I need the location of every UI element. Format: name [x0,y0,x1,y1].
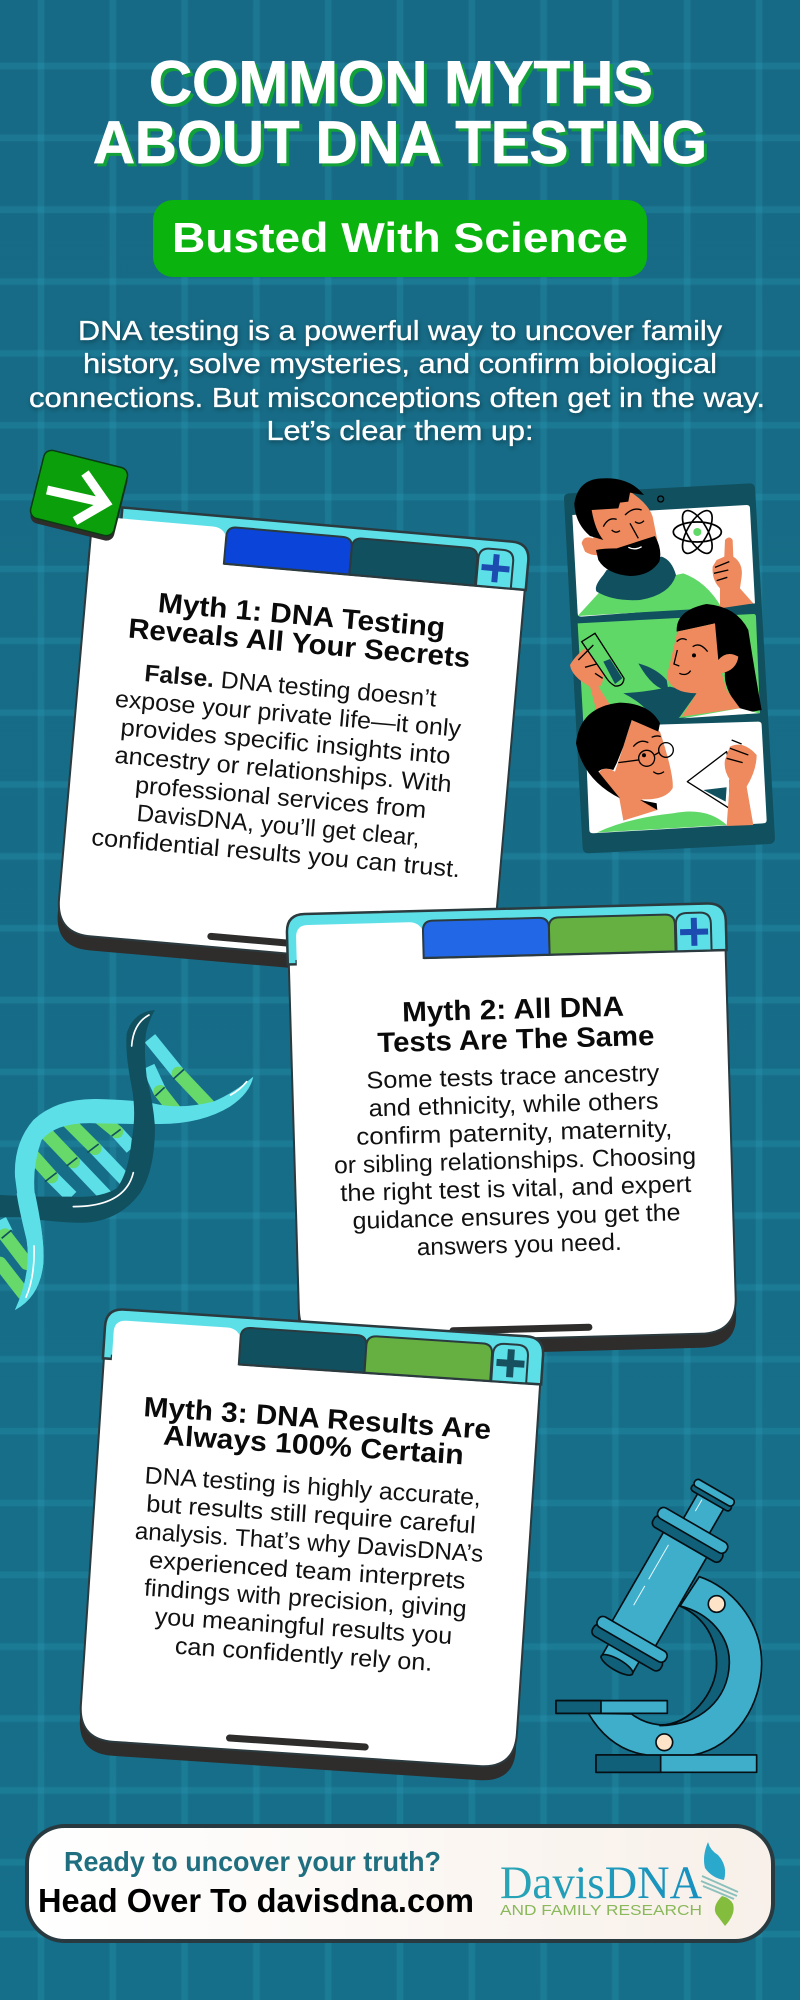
myth 2 text: or sibling relationships. Choosing [334,1143,696,1179]
myth 1 text: ancestry or relationships. With [114,742,453,798]
intro text [29,315,765,446]
myth 1 home bar [207,933,350,952]
myth 3 heading: Always 100% Certain [162,1420,465,1470]
panel 2: scientist with test tube [570,604,762,723]
myth 2 heading: Myth 2: All DNA [402,991,624,1028]
myth 3 text [127,1462,488,1680]
intro text: connections. But misconceptions often get in the way. [29,382,765,413]
myth 1 heading: Reveals All Your Secrets [127,613,471,673]
myth 3 heading: Myth 3: DNA Results Are [143,1391,492,1445]
myth 2 home bar [449,1324,592,1334]
myth 1 text: provides specific insights into [120,714,452,770]
microscope stage [556,1701,667,1713]
myth 2 text: answers you need. [416,1229,622,1261]
logo: DavisDNA: AND FAMILY RESEARCH [500,1902,702,1919]
myth 1 text: expose your private life—it only [114,686,462,743]
call to action banner [27,1826,773,1941]
myth 2 heading: Tests Are The Same [377,1020,655,1058]
panel 3: scientist with flask [576,703,767,833]
illustration: scientists on phone [564,478,775,853]
intro text: history, solve mysteries, and confirm biological [83,348,717,379]
myth 1 text [90,657,476,883]
icon: green arrow badge [29,449,129,542]
myth 3 text: but results still require careful [145,1491,476,1539]
logo: DavisDNA [500,1842,738,1926]
intro text: DNA testing is a powerful way to uncover family [78,315,722,346]
myth 1 text: professional services from [134,772,427,824]
myth 3 text: experienced team interprets [148,1547,466,1595]
myth 3 text: findings with precision, giving [143,1575,467,1623]
microscope arm [588,1577,762,1755]
illustration: DNA helix [0,1010,253,1310]
panel: myth 1 card [55,505,530,985]
myth 3 heading [141,1391,492,1472]
myth 1 heading [127,585,474,673]
title: COMMON MYTHS [149,49,653,116]
myth 2 text: guidance ensures you get the [352,1199,681,1235]
microscope tube [579,1470,752,1690]
microscope base [596,1755,757,1772]
myth 2 text: confirm paternity, maternity, [356,1115,673,1151]
myth 3 home bar [226,1734,369,1751]
panel: myth 2 card [286,903,737,1358]
myth 3 text: analysis. That’s why DavisDNA’s [134,1518,484,1568]
title [93,49,707,176]
myth 1 text: confidential results you can trust. [90,824,461,883]
panel 1: bearded scientist [572,478,755,617]
title: ABOUT DNA TESTING [93,109,707,176]
illustration: microscope [556,1470,762,1772]
intro text: Let’s clear them up: [266,415,534,446]
subtitle pill: Busted With Science [172,214,628,261]
myth 1 text: False. DNA testing doesn’t [143,660,438,713]
myth 3 text: you meaningful results you [154,1603,453,1650]
myth 1 text: DavisDNA, you’ll get clear, [136,800,421,852]
myth 3 text: DNA testing is highly accurate, [144,1462,482,1512]
myth 2 text: Some tests trace ancestry [366,1060,660,1094]
cta website: Head Over To davisdna.com [38,1882,474,1919]
myth 2 heading [376,990,655,1058]
subtitle pill [153,200,647,277]
logo: DavisDNA: DavisDNA [500,1857,702,1909]
myth 2 text: and ethnicity, while others [368,1088,659,1122]
panel: myth 3 card [77,1308,544,1783]
cta question: Ready to uncover your truth? [64,1846,441,1877]
myth 1 heading: Myth 1: DNA Testing [157,587,446,643]
myth 2 text [332,1059,699,1263]
myth 2 text: the right test is vital, and expert [340,1171,692,1207]
myth 3 text: can confidently rely on. [174,1633,433,1677]
